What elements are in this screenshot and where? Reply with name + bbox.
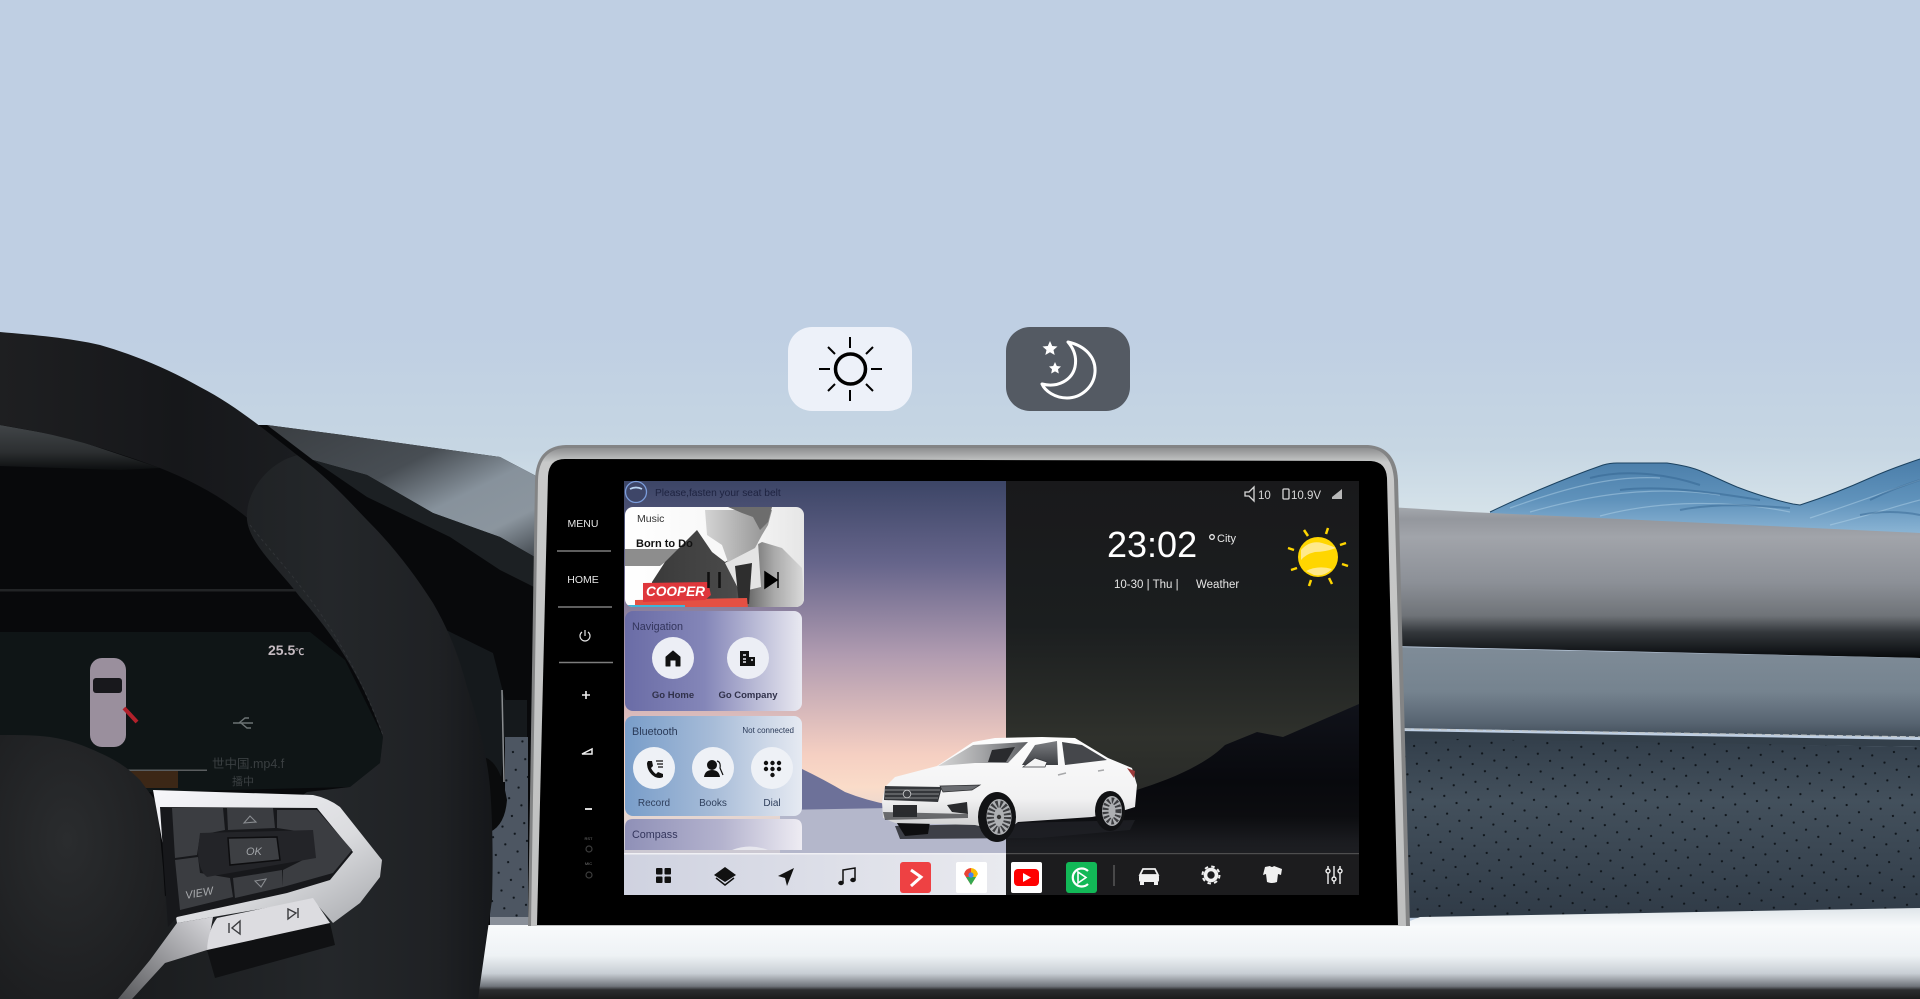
status bar: assistant badge (626, 482, 646, 502)
panel: compass card (625, 819, 802, 850)
icon: red player app (900, 862, 931, 893)
panel: bluetooth card (625, 716, 802, 816)
dock: day half (624, 853, 1006, 895)
Dial button (751, 747, 793, 809)
album photo (625, 507, 805, 608)
icon: minus (585, 808, 592, 810)
icon: music note (838, 868, 856, 885)
icon: plus (582, 691, 590, 699)
icon: volume wedge (582, 749, 592, 754)
icon: app grid (656, 868, 671, 883)
panel: navigation card (625, 611, 802, 711)
status icons (1245, 487, 1342, 502)
button: view (175, 857, 233, 910)
windshield (938, 742, 1028, 766)
right dashboard: blue leather panel with stitching (1395, 647, 1920, 747)
icon: moon and stars (1042, 341, 1095, 398)
dock: night half (1006, 853, 1359, 895)
mic label: MIC (585, 861, 592, 866)
right dashboard: perforated leather (1400, 738, 1920, 918)
cluster status text: 播中 (232, 774, 254, 788)
date: 10-30 | Thu | (1114, 579, 1179, 591)
Record button (633, 747, 675, 809)
front wheel (978, 792, 1016, 842)
panel: music card (625, 507, 805, 608)
Books button (692, 747, 734, 809)
dark mountains (1006, 704, 1359, 860)
side windows (1022, 741, 1107, 765)
Go Company button (718, 637, 778, 701)
headlight (940, 785, 980, 792)
mirror (1023, 758, 1047, 767)
Dial button: Dial (763, 798, 781, 809)
cluster progress bar (128, 770, 207, 788)
icon: t-shirt theme (1263, 866, 1282, 883)
icon: signal (1332, 489, 1342, 499)
card title: Music (637, 513, 664, 525)
icon: carplay app (1066, 862, 1097, 893)
sky background (0, 0, 1920, 560)
clock: 23:02 (1107, 524, 1197, 565)
distant mountain (802, 769, 882, 810)
card title: Compass (632, 829, 678, 841)
icon: sun (819, 337, 882, 401)
icon: weather sun (1288, 528, 1348, 586)
icon: power (580, 630, 590, 641)
album brand text: COOPER (646, 583, 706, 599)
button: OK (228, 837, 280, 865)
button: skip bar (207, 898, 335, 978)
screen: day half (624, 481, 1006, 853)
song title: Born to Do (636, 538, 693, 550)
door handles and tail light (1058, 768, 1135, 778)
day mode button (788, 327, 912, 411)
car illustration (882, 737, 1137, 842)
icon: battery (1283, 489, 1289, 499)
card title: Bluetooth (632, 726, 678, 738)
MENU label: MENU (568, 518, 598, 530)
cluster temperature: 25.5℃ (268, 642, 304, 658)
icon: youtube app (1011, 862, 1042, 893)
cluster usb icon (233, 718, 253, 728)
right dashboard: upper leather (1390, 507, 1920, 658)
cluster car icon (90, 658, 137, 747)
button: OK: OK (246, 846, 263, 858)
voltage value: 10.9V (1291, 490, 1321, 502)
head unit bezel (528, 445, 1410, 926)
icon: speaker (1245, 487, 1254, 501)
HOME label: HOME (567, 574, 599, 586)
icon: pause (708, 572, 720, 588)
icon: layers (714, 867, 736, 885)
weather label: Weather (1196, 579, 1239, 591)
Go Home button (652, 637, 694, 701)
steering wheel chrome spoke and buttons (118, 790, 382, 999)
bezel side buttons (557, 518, 613, 878)
cluster media text: 世中国.mp4.f (212, 756, 285, 771)
button: top left (172, 808, 225, 858)
status message: Please,fasten your seat belt (655, 488, 781, 499)
Record button: Record (638, 798, 670, 809)
rear wheel (1095, 791, 1125, 831)
card title: Navigation (632, 621, 683, 633)
button: down (233, 870, 283, 898)
silver dashboard trim (470, 908, 1920, 999)
instrument cluster display (0, 632, 383, 792)
icon: equalizer (1326, 866, 1342, 884)
connection status: Not connected (742, 726, 794, 735)
icon: navigation arrow (778, 868, 794, 886)
Books button: Books (699, 798, 727, 809)
screen: night half (1006, 481, 1359, 853)
icon: maps app (956, 862, 987, 893)
grille (884, 786, 942, 802)
blue hills on the horizon (1490, 459, 1920, 540)
reset and mic holes (586, 846, 592, 878)
Go Company button: Go Company (718, 690, 778, 701)
icon: up (244, 816, 256, 823)
button: center pod (198, 830, 316, 877)
button: view: VIEW (184, 885, 216, 902)
icon: settings gear (1202, 866, 1220, 884)
button: top right (277, 810, 352, 887)
steering wheel rim: upper section (0, 332, 297, 520)
left dashboard interior (0, 425, 540, 930)
icon: next track (765, 572, 778, 588)
icon: vehicle (1139, 869, 1159, 885)
lower grille and bumper (883, 802, 968, 820)
location label: City (1217, 533, 1236, 545)
steering wheel rim: lower section (130, 455, 493, 999)
volume value: 10 (1258, 490, 1271, 502)
Go Home button: Go Home (652, 690, 694, 701)
steering wheel hub (0, 735, 167, 999)
reset label: RST (584, 836, 593, 841)
night mode button (1006, 327, 1130, 411)
button: top middle (227, 808, 275, 830)
